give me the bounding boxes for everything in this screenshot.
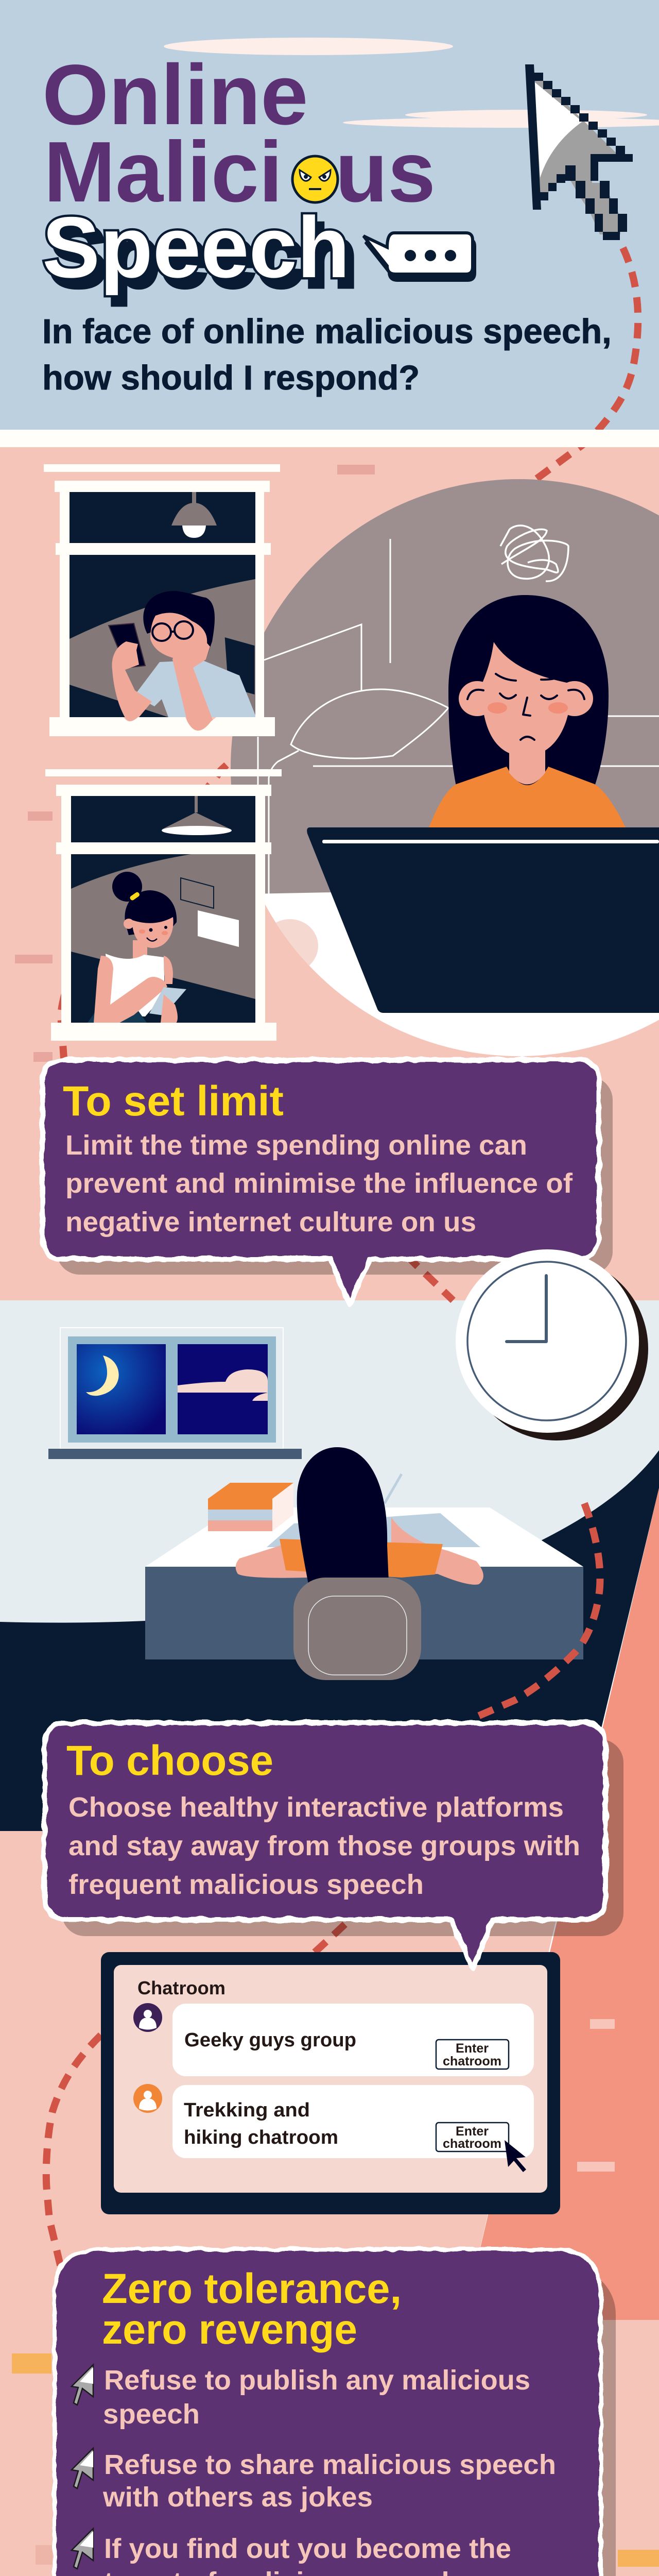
window: man with phone — [44, 464, 280, 736]
man hair — [143, 591, 215, 659]
clock face — [456, 1249, 639, 1433]
ceiling lamp — [171, 492, 217, 538]
brick marks — [15, 465, 375, 1062]
card shadow — [70, 2268, 616, 2576]
body text: and stay away from those groups with — [68, 1831, 580, 1861]
row: trekking and hiking chatroom — [133, 2084, 534, 2158]
card: to set limit — [42, 1060, 613, 1304]
hair — [297, 1447, 389, 1587]
right pane night sky — [178, 1344, 268, 1434]
woman hand — [161, 994, 178, 1024]
dashed path: below second card — [311, 1924, 345, 1955]
heading: zero revenge — [102, 2306, 357, 2353]
bullet 3 — [72, 2529, 511, 2576]
scene: girl studying at desk — [145, 1447, 583, 1680]
card body — [42, 1060, 599, 1304]
background: navy floor — [0, 1450, 659, 1831]
card shadow — [57, 1077, 613, 1275]
card body — [55, 2249, 601, 2576]
chair — [293, 1578, 421, 1680]
subtitle: In face of online malicious speech, — [42, 312, 612, 351]
face details — [139, 926, 168, 941]
title line: Malicious: Malicious — [44, 124, 436, 220]
room wall — [71, 854, 255, 999]
laptop — [307, 827, 659, 1013]
scribble above head — [500, 526, 568, 581]
window outline — [60, 1328, 283, 1449]
clock ring — [467, 1262, 626, 1420]
body text: prevent and minimise the influence of — [65, 1168, 573, 1199]
wall patch over navy — [145, 1484, 542, 1597]
background: salmon stripe — [463, 1488, 659, 2320]
room circle — [227, 474, 659, 1061]
woman ears — [459, 681, 593, 716]
scene: sad woman at laptop in round room — [227, 474, 659, 1061]
subtitle: how should I respond? — [42, 359, 420, 397]
woman lower body — [88, 1005, 147, 1023]
window frame — [68, 1336, 276, 1443]
window interior — [71, 796, 255, 1023]
icon: pixel cursor — [525, 64, 633, 240]
dashed path: header to windows — [61, 248, 638, 1058]
heading: To choose — [66, 1737, 273, 1784]
brick marks on salmon — [577, 2019, 615, 2172]
angry face replacing letter o — [292, 156, 338, 202]
body text: frequent malicious speech — [68, 1869, 424, 1900]
top window frame — [44, 464, 280, 736]
chair outline — [308, 1596, 407, 1675]
bullet 1: speech — [103, 2399, 200, 2430]
background: pink section — [0, 447, 659, 1300]
bullet 3: If you find out you become the — [104, 2533, 511, 2564]
woman arms — [94, 956, 173, 1032]
window interior — [70, 492, 255, 717]
body text: Limit the time spending online can — [65, 1130, 527, 1161]
clock hands — [507, 1276, 546, 1342]
tablet body — [101, 1952, 560, 2214]
card: to choose — [44, 1723, 623, 1969]
bullet 2: with others as jokes — [102, 2482, 373, 2513]
chatroom title: Chatroom — [137, 1977, 226, 1998]
body text: Choose healthy interactive platforms — [68, 1792, 564, 1823]
card: zero tolerance zero revenge — [55, 2249, 616, 2576]
desk top — [145, 1507, 583, 1567]
icon: mouse pointer — [505, 2140, 526, 2172]
desk front — [145, 1567, 583, 1659]
picture on wall — [224, 636, 255, 696]
title line: Speech: Speech — [42, 199, 350, 296]
bullet 2 — [72, 2448, 556, 2513]
row: trekking and hiking chatroom: Trekking and — [184, 2099, 310, 2121]
woman top — [106, 954, 165, 1016]
woman tablet — [149, 987, 186, 1015]
row: trekking and hiking chatroom: chatroom — [443, 2137, 501, 2151]
clouds — [178, 1369, 268, 1401]
wall frames — [181, 878, 214, 908]
row: geeky guys group: chatroom — [443, 2054, 501, 2069]
books — [208, 1483, 293, 1531]
woman hair — [448, 595, 609, 786]
woman face — [481, 642, 571, 756]
man glasses — [152, 621, 193, 641]
heading: To set limit — [63, 1078, 284, 1125]
background: header sky — [0, 0, 659, 430]
tablet screen — [114, 1965, 547, 2193]
colour bricks — [0, 2353, 659, 2576]
dashed path: below first card — [407, 1256, 453, 1300]
woman neck — [509, 750, 545, 784]
row: trekking and hiking chatroom: hiking chatroom — [184, 2127, 338, 2148]
row: geeky guys group: Geeky guys group — [184, 2029, 356, 2051]
title line: Online: Online — [42, 47, 308, 143]
room wall — [70, 579, 255, 717]
orange shirt — [280, 1539, 443, 1578]
row: geeky guys group: Enter — [456, 2041, 489, 2056]
bullet 2: Refuse to share malicious speech — [104, 2449, 556, 2480]
row: trekking and hiking chatroom: Enter — [456, 2124, 489, 2139]
dashed path: left side — [46, 2035, 101, 2282]
man phone — [109, 623, 145, 668]
woman bun and hair — [112, 872, 177, 935]
paper — [267, 1513, 480, 1547]
woman face — [124, 917, 174, 958]
clock — [456, 1249, 648, 1440]
window with moon — [48, 1328, 302, 1459]
pen — [385, 1474, 402, 1503]
shelf — [48, 1449, 302, 1459]
left pane night sky — [77, 1344, 166, 1434]
man shirt — [134, 660, 255, 717]
laptop highlight — [322, 840, 659, 843]
background: wall — [0, 1300, 659, 1671]
clouds — [164, 38, 659, 128]
window: woman with tablet — [45, 769, 282, 1041]
woman facial features — [467, 674, 584, 740]
white strip — [0, 430, 659, 447]
pendant lamp — [162, 796, 232, 835]
dashed path: past desk — [477, 1503, 600, 1717]
arms — [236, 1517, 483, 1585]
background: pink lower left — [0, 1831, 659, 2576]
tablet: chatroom — [101, 1952, 560, 2214]
row: geeky guys group — [133, 2003, 534, 2076]
card body — [44, 1723, 605, 1969]
man arm and hand holding phone — [112, 641, 152, 722]
man leaning arm — [172, 639, 214, 735]
speech bubble icon — [363, 233, 473, 274]
lower window frame — [45, 769, 282, 1041]
man face — [150, 613, 207, 659]
title — [42, 47, 612, 397]
moon — [86, 1355, 119, 1396]
woman shirt — [429, 767, 626, 827]
bullet 1 — [72, 2365, 530, 2430]
heading: Zero tolerance, — [102, 2265, 402, 2312]
bullet 1: Refuse to publish any malicious — [104, 2365, 530, 2396]
clock shadow — [465, 1257, 648, 1440]
card shadow — [62, 1739, 623, 1936]
body text: negative internet culture on us — [65, 1207, 476, 1238]
